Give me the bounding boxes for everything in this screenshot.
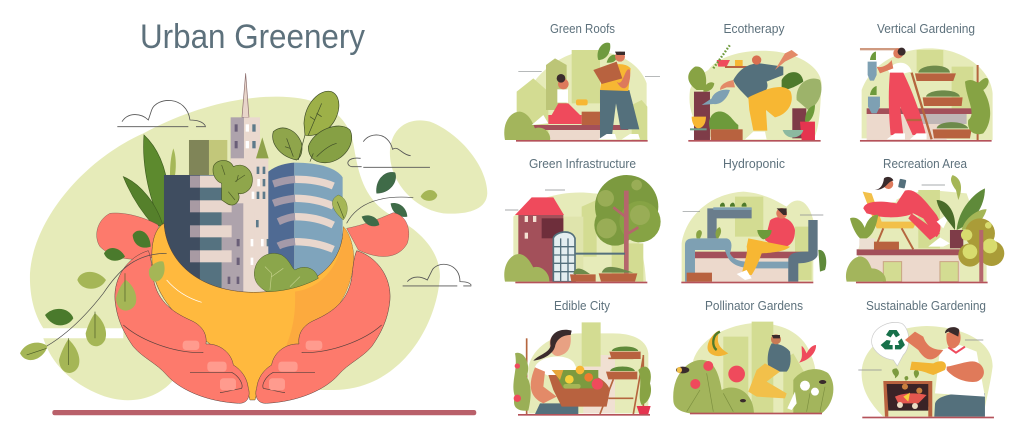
- spire tower: [222, 73, 277, 292]
- top leaves: [273, 91, 352, 163]
- scene: Green Infrastructure: [504, 175, 661, 283]
- background blobs: [30, 97, 487, 400]
- scene: Edible City: [513, 322, 651, 416]
- panel: Pollinator Gardens: [673, 299, 833, 414]
- round blue building: [268, 163, 343, 287]
- panel: Edible City: [513, 299, 651, 416]
- heading: Pollinator Gardens: Pollinator Gardens: [705, 299, 803, 313]
- back plants: [123, 135, 227, 227]
- panel: Green Roofs: [504, 22, 660, 142]
- scene: Sustainable Gardening: [858, 322, 994, 418]
- heading: Vertical Gardening: Vertical Gardening: [877, 22, 975, 36]
- heading: Green Roofs: Green Roofs: [550, 22, 615, 36]
- heading: Green Infrastructure: Green Infrastructure: [529, 157, 636, 171]
- scene: Green Roofs: [504, 43, 660, 142]
- left hand: [115, 251, 249, 403]
- panel: Hydroponic: [681, 157, 826, 283]
- bush in pot: [254, 253, 318, 292]
- right hand: [256, 251, 390, 403]
- tree in front of towers: [213, 160, 252, 205]
- scene: Pollinator Gardens: [673, 322, 833, 414]
- scene: Hydroponic: [681, 192, 826, 283]
- main illustration: hands holding a city: [20, 73, 487, 415]
- ground bar: [52, 410, 476, 415]
- heading: Edible City: Edible City: [554, 299, 611, 313]
- heading: Ecotherapy: Ecotherapy: [724, 22, 785, 36]
- panel: Recreation Area: [846, 157, 1004, 283]
- dark building: [164, 175, 232, 288]
- scene: Recreation Area: [846, 175, 1004, 283]
- right sprig leaves: [376, 172, 437, 217]
- clouds: [117, 100, 471, 286]
- right sprig stem: [332, 195, 413, 226]
- icon: recycle symbol: [881, 330, 905, 349]
- panel: Green Infrastructure: [504, 157, 661, 283]
- heading: Hydroponic: Hydroponic: [723, 157, 785, 171]
- panel: Vertical Gardening: [860, 22, 993, 142]
- panel: Ecotherapy: [688, 22, 822, 142]
- scene: Ecotherapy: [688, 45, 822, 142]
- title: Urban Greenery: [140, 18, 365, 56]
- back hand thumbs: [97, 213, 409, 259]
- yellow pot: [152, 223, 354, 400]
- heading: Sustainable Gardening: Sustainable Gardening: [866, 299, 986, 313]
- panel: Sustainable Gardening: [858, 299, 994, 418]
- heading: Recreation Area: Recreation Area: [883, 157, 967, 171]
- scene: Vertical Gardening: [860, 48, 993, 142]
- left sprig with leaves: [20, 231, 167, 373]
